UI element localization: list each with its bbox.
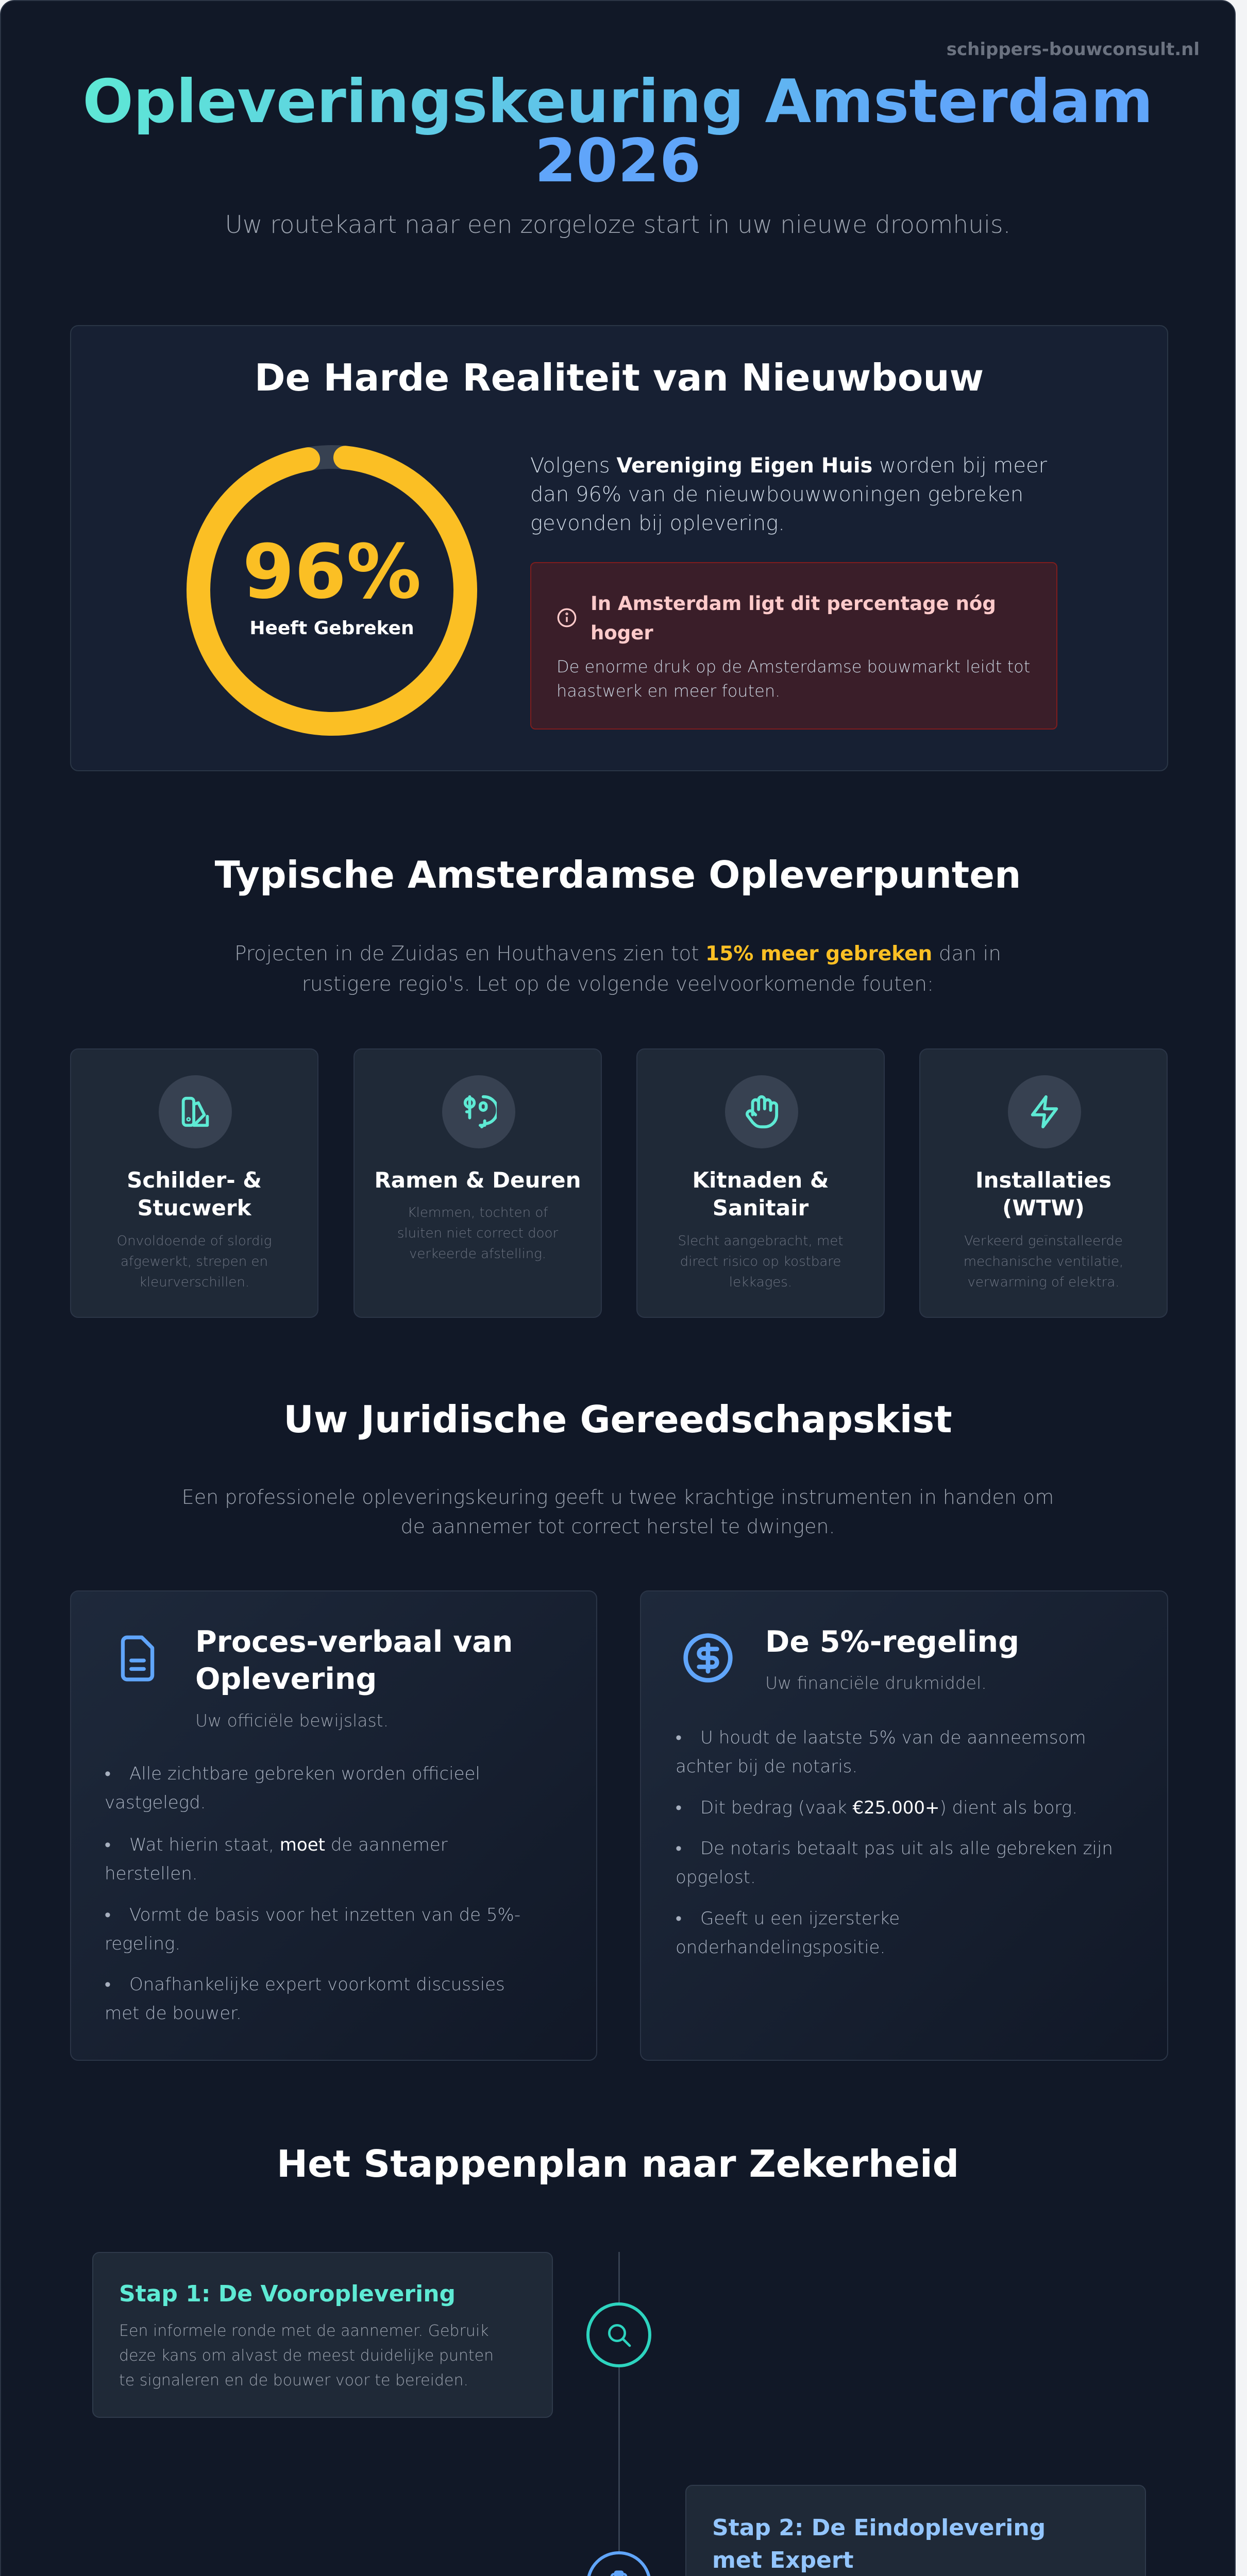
bullet list: Dit bedrag (vaak €25.000+) dient als borg.	[700, 1798, 1077, 1818]
callout title: hoger	[591, 622, 653, 644]
panel: harde realiteit	[70, 325, 1168, 771]
step 2 card	[685, 2485, 1146, 2576]
heading: harde realiteit: De Harde Realiteit van Nieuwbouw	[255, 356, 984, 399]
card text: Slecht aangebracht, met	[678, 1233, 844, 1249]
icon: paint	[159, 1075, 232, 1148]
card: ramen	[353, 1048, 602, 1318]
card text: Klemmen, tochten of	[408, 1205, 548, 1221]
card title	[975, 1167, 1111, 1221]
card title: (WTW)	[1002, 1195, 1085, 1221]
bullet list: Alle zichtbare gebreken worden officieel	[129, 1764, 480, 1784]
card: kitnaden	[636, 1048, 885, 1318]
bullet list: Vormt de basis voor het inzetten van de 5%-	[129, 1905, 520, 1925]
card title	[127, 1167, 262, 1221]
title: 2026	[535, 126, 701, 196]
title: Oplevering	[195, 1662, 377, 1696]
card text	[678, 1233, 844, 1290]
card text: verkeerde afstelling.	[409, 1246, 546, 1262]
bullet list: •	[676, 1798, 682, 1818]
intro: opleverpunten: Projecten in de Zuidas en Houthavens zien tot 15% meer gebreken dan in	[234, 942, 1001, 965]
bullet list: •	[676, 1908, 682, 1929]
card text: Onvoldoende of slordig	[117, 1233, 272, 1249]
bullet list: U houdt de laatste 5% van de aanneemsom	[700, 1727, 1086, 1748]
bullet list: vastgelegd.	[105, 1792, 206, 1813]
card text: lekkages.	[729, 1275, 792, 1290]
icon: dollar	[683, 1633, 733, 1683]
card text: afgewerkt, strepen en	[121, 1254, 268, 1269]
callout title	[591, 592, 996, 644]
card text	[397, 1205, 559, 1262]
icon: document	[121, 1635, 155, 1682]
icon: info	[558, 608, 576, 628]
callout: amsterdam hoger	[530, 562, 1057, 730]
heading: opleverpunten: Typische Amsterdamse Opleverpunten	[215, 853, 1021, 896]
intro: toolkit: de aannemer tot correct herstel te dwingen.	[400, 1515, 835, 1538]
bullet list: opgelost.	[676, 1867, 756, 1888]
text: vereniging eigen huis: gevonden bij oplevering.	[530, 512, 785, 535]
title	[195, 1625, 513, 1696]
title: Proces-verbaal van	[195, 1625, 513, 1659]
bullet list: Onafhankelijke expert voorkomt discussies	[129, 1974, 505, 1995]
card title	[693, 1167, 829, 1221]
card title: Installaties	[975, 1167, 1111, 1193]
subtitle: Uw routekaart naar een zorgeloze start in uw nieuwe droomhuis.	[225, 211, 1010, 239]
callout title: In Amsterdam ligt dit percentage nóg	[591, 592, 996, 615]
watermark: schippers-bouwconsult.nl	[947, 39, 1200, 60]
icon: lightning	[1008, 1075, 1081, 1148]
card title: Schilder- &	[127, 1167, 262, 1193]
bullet list: •	[105, 1905, 111, 1925]
bullet list: regeling.	[105, 1934, 180, 1954]
card text: direct risico op kostbare	[680, 1254, 841, 1269]
card title: Sanitair	[713, 1195, 808, 1221]
step title: Stap 1: De Vooroplevering	[119, 2281, 456, 2307]
step title	[712, 2512, 1046, 2576]
icon: hand	[725, 1075, 798, 1148]
card: installaties	[919, 1048, 1168, 1318]
text: vereniging eigen huis: dan 96% van de nieuwbouwwoningen gebreken	[530, 483, 1023, 506]
step title: Stap 2: De Eindoplevering	[712, 2515, 1046, 2541]
card text: verwarming of elektra.	[967, 1275, 1120, 1290]
card text: mechanische ventilatie,	[964, 1254, 1123, 1269]
bullet list: onderhandelingspositie.	[676, 1937, 885, 1958]
bullet list	[105, 1764, 520, 2024]
donut chart 96%	[187, 445, 477, 736]
timeline line	[618, 2252, 620, 2576]
stat: 96%: 96%	[242, 529, 422, 616]
intro: toolkit: Een professionele opleveringskeuring geeft u twee krachtige instrumenten in handen om	[182, 1486, 1054, 1509]
bullet list: herstellen.	[105, 1863, 198, 1884]
card text	[117, 1233, 272, 1290]
bullet list: •	[676, 1727, 682, 1748]
bullet list: achter bij de notaris.	[676, 1756, 857, 1777]
card title: Ramen & Deuren	[374, 1167, 581, 1193]
callout text	[557, 657, 1030, 701]
icon: rotate	[442, 1075, 515, 1148]
card text: sluiten niet correct door	[397, 1226, 558, 1241]
step title: met Expert	[712, 2547, 854, 2573]
title: Opleveringskeuring Amsterdam	[82, 67, 1153, 137]
bullet list: De notaris betaalt pas uit als alle gebreken zijn	[700, 1838, 1113, 1859]
node: clipboard	[586, 2551, 651, 2576]
step 1 card	[92, 2252, 553, 2418]
node: search	[586, 2302, 651, 2367]
bullet list: •	[105, 1764, 111, 1784]
text: vereniging eigen huis	[530, 454, 1047, 535]
card text: kleurverschillen.	[139, 1275, 249, 1290]
heading: stappenplan: Het Stappenplan naar Zekerheid	[277, 2142, 959, 2185]
card title: Kitnaden &	[693, 1167, 829, 1193]
intro: toolkit	[182, 1486, 1054, 1538]
intro: opleverpunten	[234, 942, 1001, 996]
card text	[964, 1233, 1123, 1290]
intro: opleverpunten: rustigere regio's. Let op de volgende veelvoorkomende fouten:	[302, 973, 934, 996]
step text: te signaleren en de bouwer voor te bereiden.	[119, 2371, 468, 2389]
title	[82, 67, 1153, 196]
bullet list: •	[105, 1974, 111, 1995]
heading: toolkit: Uw Juridische Gereedschapskist	[283, 1398, 952, 1441]
stat label: Heeft Gebreken	[249, 618, 414, 639]
panel: proces-verbaal	[70, 1590, 597, 2061]
title: De 5%-regeling	[765, 1625, 1019, 1659]
bullet list: Geeft u een ijzersterke	[700, 1908, 900, 1929]
callout text: haastwerk en meer fouten.	[557, 681, 780, 701]
card: schilder	[70, 1048, 318, 1318]
callout text: De enorme druk op de Amsterdamse bouwmarkt leidt tot	[557, 657, 1030, 676]
panel: 5%-regeling	[640, 1590, 1168, 2061]
step text	[119, 2319, 494, 2393]
card text: Verkeerd geïnstalleerde	[964, 1233, 1123, 1249]
bullet list: •	[676, 1838, 682, 1859]
text: vereniging eigen huis: Volgens Vereniging Eigen Huis worden bij meer	[530, 454, 1047, 478]
bullet list: met de bouwer.	[105, 2003, 242, 2024]
step text: Een informele ronde met de aannemer. Gebruik	[119, 2322, 489, 2340]
bullet list: Wat hierin staat, moet de aannemer	[129, 1835, 448, 1855]
card title: Stucwerk	[137, 1195, 251, 1221]
subtitle: Uw financiële drukmiddel.	[765, 1673, 987, 1693]
bullet list: •	[105, 1835, 111, 1855]
step text: deze kans om alvast de meest duidelijke punten	[119, 2347, 494, 2365]
bullet list	[676, 1727, 1113, 1958]
subtitle: Uw officiële bewijslast.	[195, 1710, 389, 1731]
